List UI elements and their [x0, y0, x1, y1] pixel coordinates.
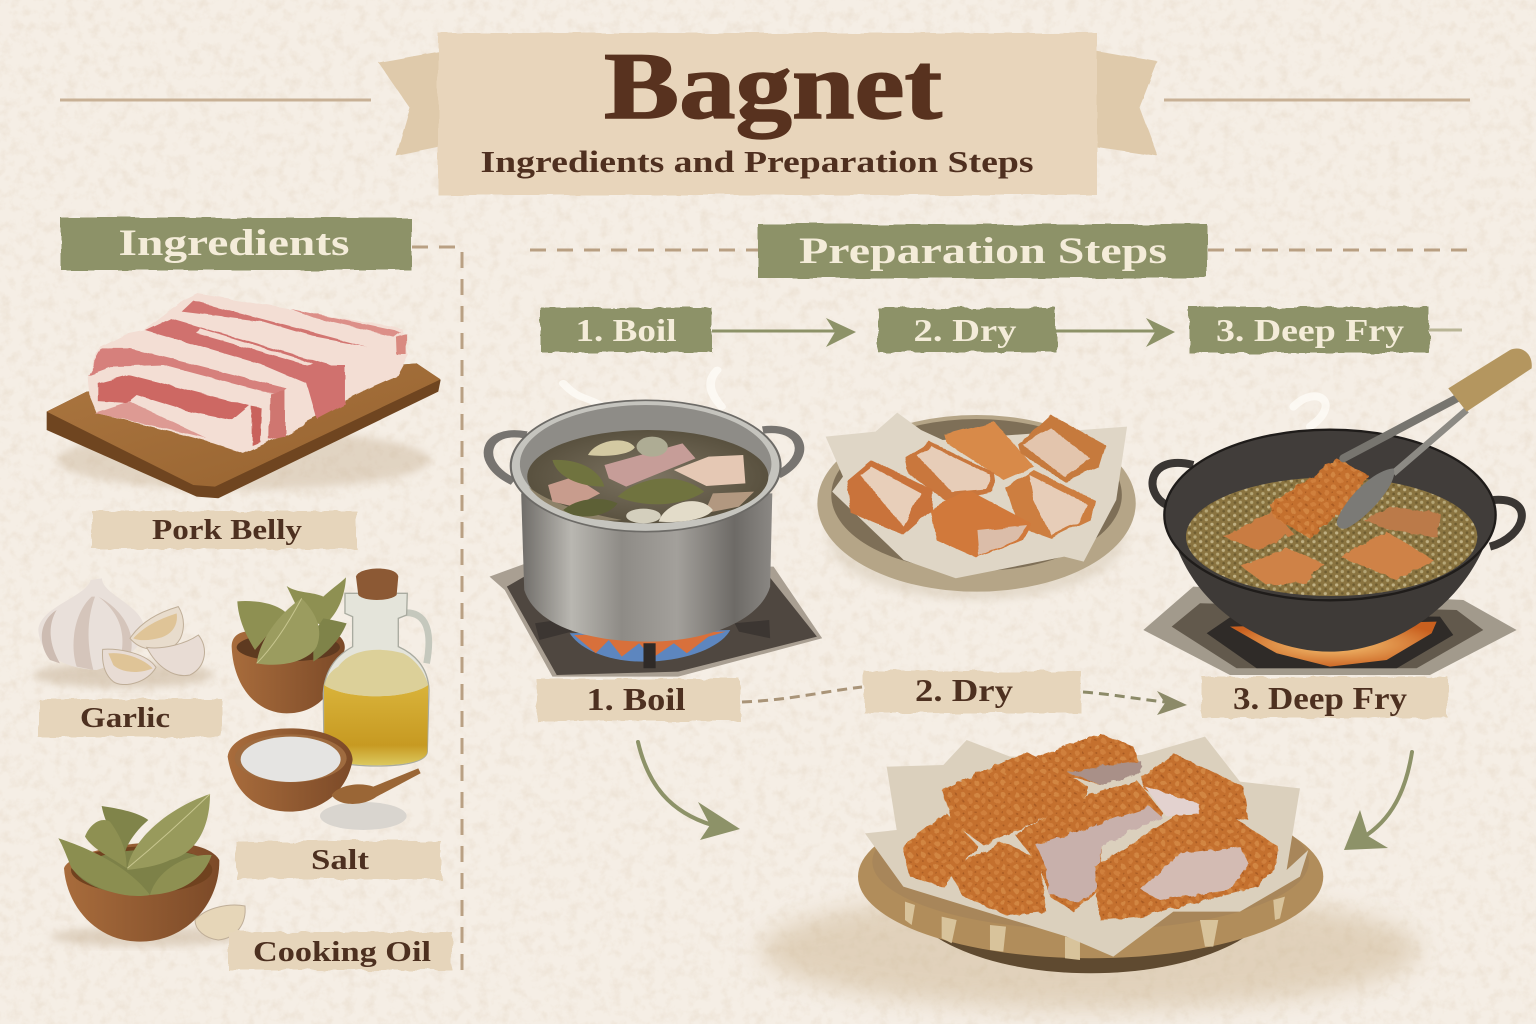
broth with ingredients — [527, 430, 768, 523]
arrow: label boil to label dry — [742, 687, 862, 702]
preparation steps heading — [758, 224, 1207, 278]
basket — [858, 793, 1323, 973]
spilled salt — [320, 802, 407, 830]
label: 3. Deep Fry: 3. Deep Fry — [1233, 680, 1407, 716]
title banner — [378, 33, 1158, 195]
label: 1. Boil: 1. Boil — [586, 681, 686, 717]
label: salt — [236, 841, 441, 879]
garlic clove — [195, 905, 245, 940]
pot body — [521, 493, 772, 642]
glass — [323, 593, 429, 766]
steam — [563, 370, 722, 407]
icon: bay leaf bowl with garlic clove — [50, 794, 245, 947]
label: 3. Deep Fry — [1202, 677, 1448, 718]
wok rim and inner wall — [1164, 430, 1496, 600]
fried pork chunks — [902, 733, 1278, 920]
label: pork belly: Pork Belly — [152, 514, 303, 546]
held pork piece — [1270, 458, 1368, 538]
label: cooking oil: Cooking Oil — [253, 936, 431, 968]
arrow: boil to dry — [712, 318, 856, 347]
preparation steps heading: Preparation Steps — [799, 231, 1167, 272]
label: 2. Dry — [864, 671, 1081, 713]
label: garlic — [38, 699, 222, 737]
title side rules — [60, 98, 1470, 102]
pork cubes — [847, 415, 1105, 558]
icon: salt bowl and spoon — [228, 728, 421, 830]
title: Bagnet — [604, 33, 942, 139]
trailing line after deep fry — [1429, 328, 1462, 332]
ingredients heading — [61, 218, 411, 270]
arrow: deep fry to finished dish — [1344, 752, 1412, 850]
bowl — [228, 728, 353, 812]
banner panel — [438, 33, 1097, 195]
oil — [324, 685, 428, 765]
subtitle: Ingredients and Preparation Steps — [480, 144, 1034, 179]
shadow under board — [57, 430, 430, 490]
upper right chunk — [1142, 753, 1248, 820]
far left chunk — [902, 813, 978, 887]
salt — [241, 737, 341, 782]
lower chunk — [948, 842, 1047, 915]
arrow: boil to finished dish — [638, 742, 740, 840]
label: salt: Salt — [311, 844, 369, 876]
spoon — [332, 768, 421, 804]
cutting board — [47, 363, 441, 498]
step tag: 2. Dry — [878, 308, 1056, 352]
pork slab — [87, 293, 408, 453]
wok burner — [1143, 587, 1517, 675]
icon: cooking oil bottle — [323, 569, 429, 766]
frying oil — [1186, 477, 1477, 596]
tongs — [1337, 349, 1532, 529]
wok handles — [1153, 463, 1193, 505]
pot handles — [488, 434, 526, 482]
wooden bowl — [64, 842, 219, 942]
pot rim — [511, 400, 781, 532]
step tag: 3. Deep Fry — [1189, 307, 1429, 353]
parchment — [865, 737, 1308, 957]
wok body — [1173, 537, 1487, 652]
label: pork belly — [92, 511, 357, 549]
icon: bay leaves in bowl — [232, 577, 347, 713]
garlic bulb — [38, 578, 144, 670]
gas burner — [490, 564, 822, 677]
label: cooking oil — [228, 932, 452, 970]
handle — [400, 613, 429, 663]
cork — [356, 569, 398, 600]
back chunk — [1037, 733, 1142, 785]
section dashed dividers — [412, 247, 1475, 975]
paper liner — [826, 413, 1127, 578]
label: garlic: Garlic — [80, 702, 170, 734]
illustration: finished bagnet in woven basket — [858, 733, 1323, 973]
ingredients heading: Ingredients — [118, 223, 350, 264]
bay leaves — [73, 850, 207, 895]
label: 1. Boil — [537, 679, 740, 721]
icon: pork belly on cutting board — [47, 293, 441, 498]
icon: garlic — [33, 578, 213, 688]
left ribbon tail — [378, 50, 445, 156]
step tag: 1. Boil — [541, 308, 712, 352]
step tag: 3. Deep Fry: 3. Deep Fry — [1216, 312, 1404, 348]
pot inner wall — [520, 405, 771, 523]
front right chunk — [1095, 815, 1278, 920]
center chunk — [1015, 780, 1163, 912]
arrow: dry to deep fry — [1056, 318, 1175, 347]
upper left chunk — [942, 752, 1088, 845]
step tag: 2. Dry: 2. Dry — [914, 312, 1016, 348]
illustration: drying plate with pork cubes — [817, 413, 1136, 600]
plate — [817, 415, 1136, 592]
bowl back — [232, 631, 345, 713]
right ribbon tail — [1090, 50, 1158, 156]
frying pork pieces — [1223, 507, 1440, 585]
garlic cloves — [130, 607, 183, 650]
leaves — [237, 601, 287, 650]
steam — [1293, 396, 1326, 427]
arrow: label dry to label deep fry — [1083, 691, 1187, 715]
step tag: 1. Boil: 1. Boil — [576, 312, 677, 348]
illustration: wok with frying pork and tongs — [1143, 349, 1532, 675]
illustration: boiling pot on burner — [488, 370, 822, 677]
label: 2. Dry: 2. Dry — [915, 672, 1013, 708]
